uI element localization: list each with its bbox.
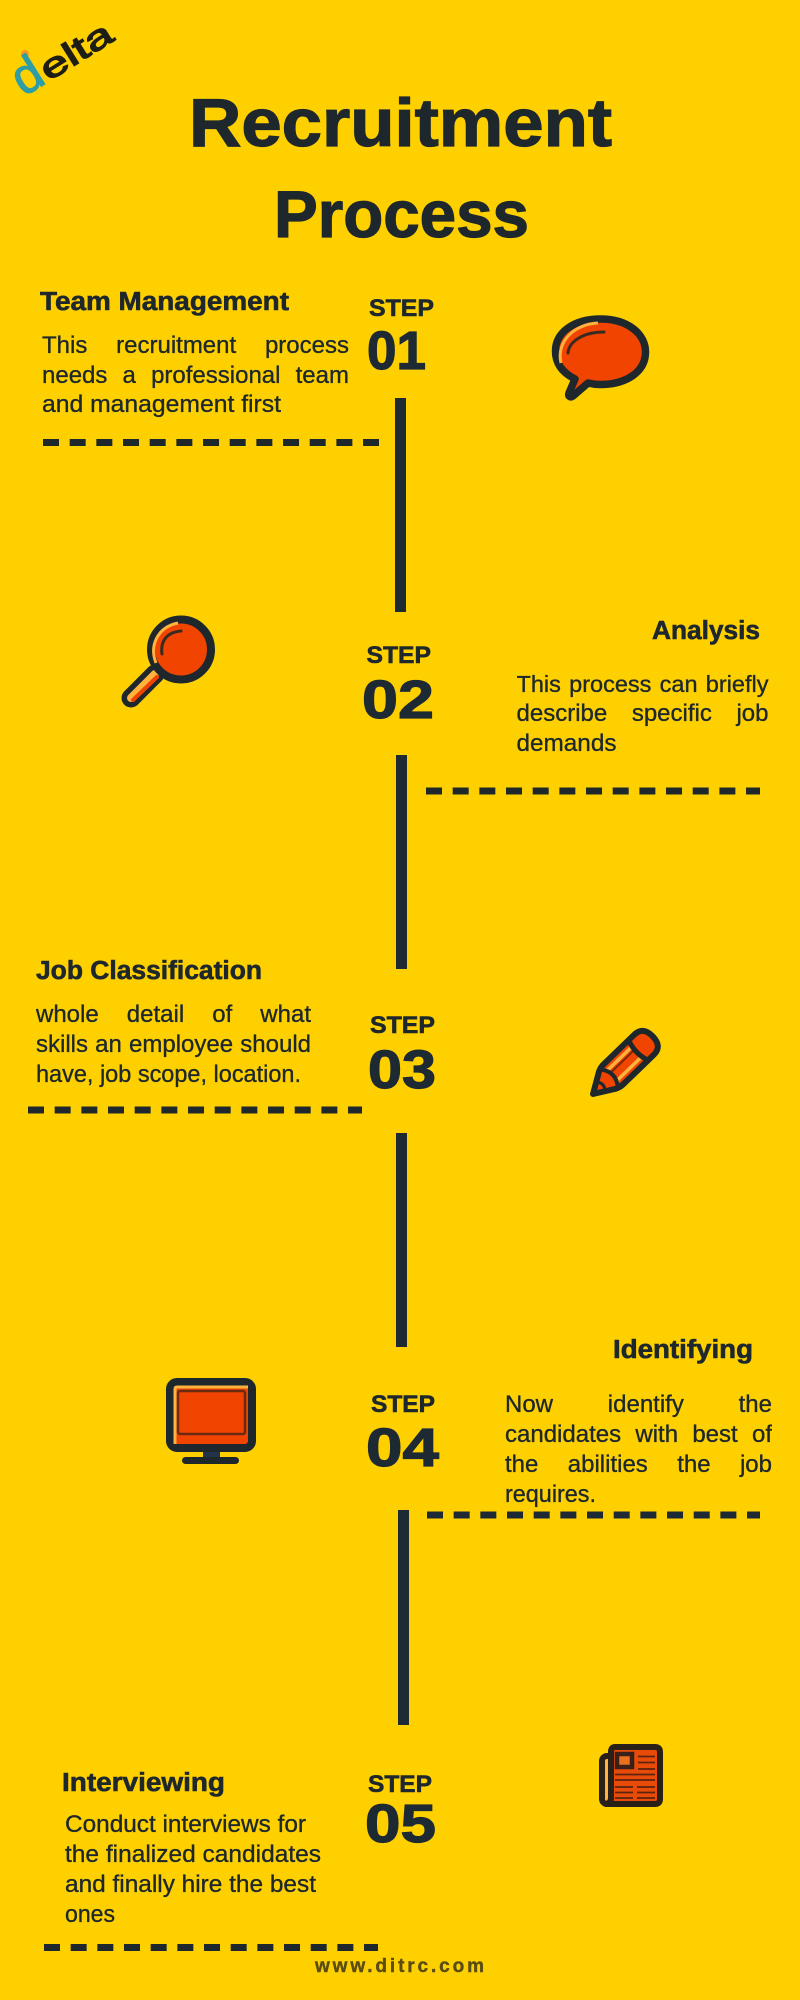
text block: analysis description (516, 669, 768, 757)
icon: speech bubble (556, 319, 646, 397)
logo: delta: elta (33, 14, 120, 88)
text block: team management description: and management first (42, 391, 281, 418)
heading: analysis: Analysis (652, 617, 760, 645)
connector line 1 (395, 398, 406, 612)
title: Recruitment (189, 85, 612, 161)
icon: computer monitor (170, 1382, 252, 1464)
step label 04: 04 (366, 1418, 439, 1478)
icon: pencil (583, 1026, 662, 1104)
panel: step 1 team management (40, 288, 646, 442)
logo: delta: d (0, 44, 53, 106)
text block: identifying description: the abilities the job (505, 1450, 772, 1478)
step label 01: 01 (367, 321, 426, 381)
icon: newspaper (602, 1747, 660, 1804)
step label 02: STEP (366, 642, 431, 669)
panel: step 2 analysis (131, 617, 768, 791)
step label 01: STEP (369, 295, 434, 322)
text block: job classification description (36, 1000, 311, 1088)
text block: team management description: needs a professional team (42, 362, 349, 388)
step label 05: 05 (365, 1794, 436, 1854)
text block: job classification description: skills an employee should (36, 1030, 311, 1058)
heading: team management: Team Management (40, 288, 290, 316)
step label 04 (366, 1391, 439, 1478)
title (189, 85, 612, 251)
text block: analysis description: demands (516, 730, 616, 757)
icon: magnifying glass (131, 620, 211, 700)
text block: team management description (42, 330, 349, 418)
step label 05: STEP (368, 1771, 432, 1798)
text block: interviewing description (65, 1811, 321, 1928)
text block: interviewing description: Conduct interviews for (65, 1811, 306, 1838)
step label 02 (362, 642, 434, 730)
connector line 2 (396, 755, 407, 969)
step label 02: 02 (362, 670, 434, 730)
text block: job classification description: whole detail of what (36, 1000, 311, 1028)
connector line 3 (396, 1133, 407, 1347)
text block: analysis description: This process can briefly (516, 671, 768, 697)
heading: interviewing: Interviewing (62, 1769, 225, 1797)
text block: identifying description: Now identify the (505, 1390, 772, 1418)
panel: step 4 identifying (170, 1336, 772, 1515)
text block: analysis description: describe specific job (516, 700, 768, 727)
step label 03 (368, 1012, 436, 1100)
connector line 4 (398, 1510, 409, 1725)
text block: team management description: This recruitment process (42, 332, 349, 358)
panel: step 5 interviewing (44, 1747, 660, 1948)
heading: job classification: Job Classification (36, 957, 262, 985)
text block: interviewing description: the finalized candidates (65, 1841, 321, 1868)
step label 04: STEP (371, 1391, 435, 1418)
footer url: www.ditrc.com (314, 1956, 484, 1977)
text block: interviewing description: ones (65, 1901, 115, 1928)
step label 03: 03 (368, 1040, 436, 1100)
step label 03: STEP (370, 1012, 435, 1039)
title: Process (274, 177, 529, 251)
text block: identifying description: requires. (505, 1481, 596, 1508)
step label 05 (365, 1771, 436, 1854)
step label 01 (367, 295, 434, 381)
logo: delta (0, 2, 122, 106)
text block: job classification description: have, job scope, location. (36, 1061, 301, 1088)
text block: identifying description (505, 1390, 772, 1508)
text block: identifying description: candidates with best of (505, 1420, 772, 1448)
text block: interviewing description: and finally hire the best (65, 1871, 316, 1898)
heading: identifying: Identifying (613, 1336, 753, 1364)
panel: step 3 job classification (28, 957, 662, 1110)
